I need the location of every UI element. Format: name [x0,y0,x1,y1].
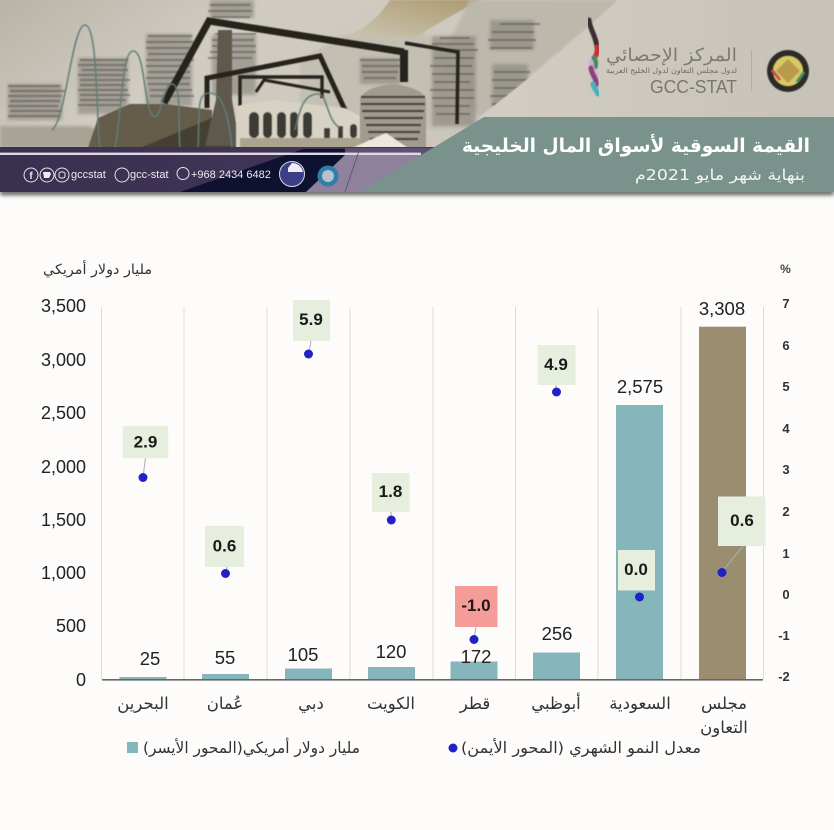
black arch frames [164,21,458,124]
category labels: مجلس [701,694,747,713]
callout: Bahrain: 2.9 [134,432,157,452]
icon: GCC emblem [767,50,809,92]
right axis: 7 [782,296,790,311]
minaret [205,30,240,146]
left axis: 1,500 [41,510,86,530]
callout: Dubai [293,300,330,341]
subtitle text: بنهاية شهر مايو 2021م [635,166,805,184]
title text: القيمة السوقية لأسواق المال الخليجية [462,134,810,157]
right axis: 4 [782,421,790,436]
GCC-STAT logo [589,20,809,97]
callout: Abu Dhabi [538,345,576,385]
left axis: 0 [76,670,86,690]
callout: Qatar [455,586,498,627]
contact text: gccstat [71,169,106,181]
growth dots [138,350,726,644]
baseline [102,679,763,681]
callout: Saudi: 0.0 [624,560,648,579]
green wave lines [52,25,340,148]
logo text: المركز الإحصائي [606,45,737,66]
right axis: 2 [782,504,790,519]
left axis: 3,500 [41,296,86,316]
icon: round badge 1 [280,162,304,186]
category labels [117,692,748,738]
callout: Bahrain [123,426,168,458]
bar value labels: 25 [140,648,160,669]
category labels: الكويت [367,694,415,714]
chart [41,260,791,758]
bar value labels: 3,308 [699,298,745,319]
title panel [360,117,834,192]
legend: dots: معدل النمو الشهري (المحور الأيمن) [461,738,701,758]
gridlines [102,307,764,679]
category labels: دبي [298,694,324,714]
bar value labels: 2,575 [617,376,663,397]
bar value labels: 55 [215,647,235,668]
bar value labels: 105 [288,644,318,665]
contact row: +968 2434 6482 [191,169,271,181]
bar value labels: 120 [376,641,406,662]
left axis [41,296,86,690]
growth value callouts [123,300,765,627]
bar value labels: 256 [542,623,572,644]
callout: Kuwait: 1.8 [379,482,402,501]
right axis: -1 [778,628,790,643]
right axis: 0 [782,587,790,602]
bars [120,327,746,680]
contact row: gcc-stat [130,169,169,181]
callout: Oman [205,526,244,567]
left axis: 1,000 [41,563,86,583]
right axis: 3 [782,462,790,477]
category labels: التعاون [700,718,748,738]
contact row: f [29,171,33,182]
left axis: 500 [56,616,86,636]
right axis: 5 [782,379,790,394]
category labels: أبوظبي [531,692,581,714]
leader lines [143,341,743,639]
category labels: قطر [459,694,490,714]
beige logo area [478,0,834,118]
purple contact band [0,147,834,192]
callout: Abu Dhabi: 4.9 [544,355,568,374]
callout: Saudi [618,550,655,590]
callout: Oman: 0.6 [213,536,236,556]
right axis: 1 [782,546,790,561]
right axis title: % [780,262,791,276]
category labels: البحرين [117,694,169,714]
callout: Kuwait [372,473,410,512]
category labels: السعودية [609,694,671,714]
header banner [0,0,834,195]
legend: bars: مليار دولار أمريكي(المحور الأيسر) [143,737,360,758]
right axis: 6 [782,338,790,353]
callout: GCC [718,496,766,546]
GCC-STAT logo: لدول مجلس التعاون لدول الخليج العربية [606,66,737,75]
right axis: -2 [778,669,790,684]
left axis: 3,000 [41,350,86,370]
right axis [778,296,790,684]
category labels: عُمان [207,694,243,713]
header photo collage [0,0,834,148]
GCC-STAT logo: GCC-STAT [650,77,737,97]
icons: social [24,168,189,182]
icon: round badge 2 [318,166,338,186]
rocky ground [88,104,212,148]
palace building [236,100,360,148]
callout: Qatar: -1.0 [461,596,491,615]
callout: Dubai: 5.9 [299,310,323,329]
left axis title: مليار دولار أمريكي [43,260,152,278]
legend [127,737,701,758]
contact row [24,168,271,182]
bar value labels: 172 [461,646,491,667]
icon: ribbon [589,20,598,94]
left axis: 2,500 [41,403,86,423]
left axis: 2,000 [41,457,86,477]
callout: GCC: 0.6 [730,511,754,530]
bar value labels [140,298,745,669]
blurred towers [8,0,534,126]
round tower [352,84,426,148]
